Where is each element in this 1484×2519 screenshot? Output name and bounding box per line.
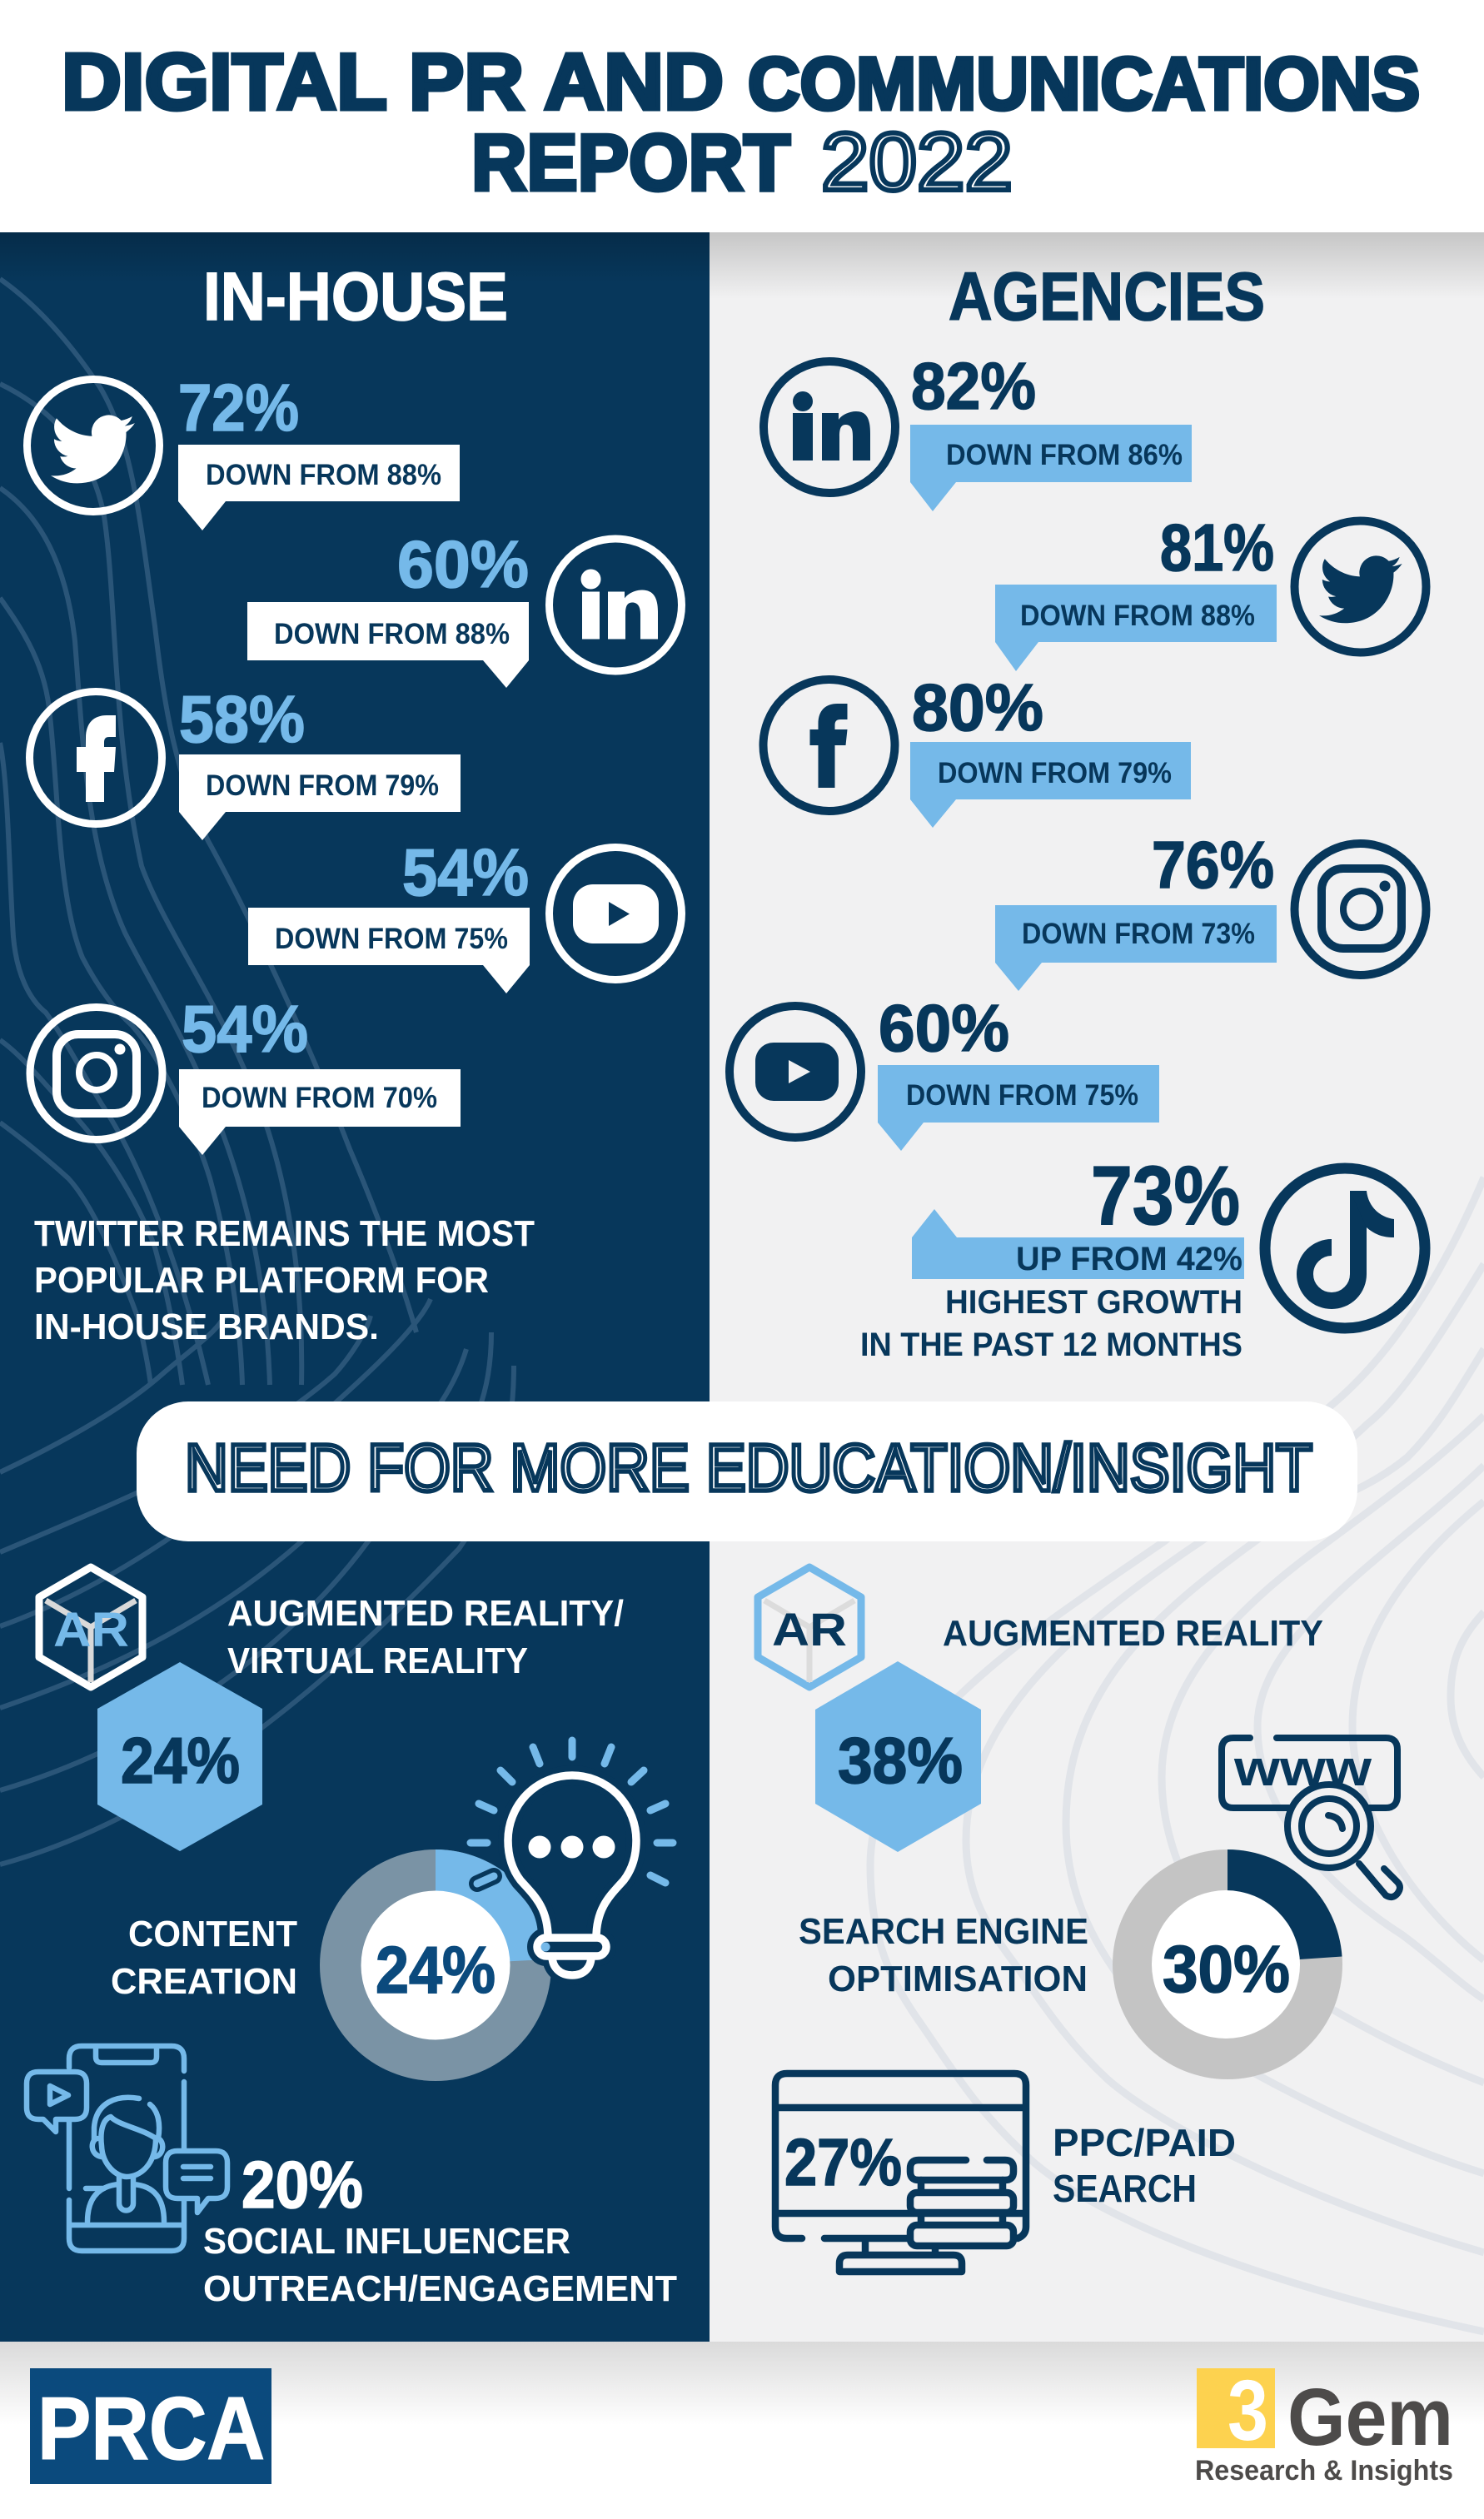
in-house facebook stat	[30, 682, 461, 840]
agencies SEO label	[799, 1911, 1088, 1999]
in-house AR icon: AR	[53, 1603, 129, 1657]
in-house AR label	[227, 1593, 624, 1681]
agencies youtube stat: 60%	[879, 991, 1009, 1065]
agencies youtube stat: DOWN FROM 75%	[906, 1079, 1138, 1112]
logo: 3Gem: Research & Insights	[1195, 2455, 1453, 2487]
agencies instagram stat: 76%	[1152, 828, 1274, 902]
icon: light bulb	[471, 1740, 673, 1975]
in-house content creation label	[111, 1914, 297, 2002]
agencies SEO label: SEARCH ENGINE	[799, 1911, 1088, 1952]
icon: twitter	[1294, 521, 1426, 653]
agencies donut chart: 30%	[1163, 1932, 1290, 2006]
agencies linkedin stat	[764, 349, 1192, 511]
agencies linkedin stat: DOWN FROM 86%	[946, 439, 1183, 471]
icon: tiktok	[1265, 1168, 1425, 1328]
logo: 3Gem: Gem	[1287, 2372, 1453, 2462]
agencies linkedin stat: 82%	[911, 349, 1036, 423]
in-house social influencer stat: 20%	[242, 2148, 363, 2222]
in-house instagram stat: 54%	[182, 992, 308, 1066]
agencies tiktok stat: IN THE PAST 12 MONTHS	[860, 1327, 1242, 1363]
in-house donut chart: 24%	[376, 1933, 495, 2007]
agencies PPC label: SEARCH	[1053, 2167, 1197, 2210]
panel: agencies	[710, 232, 1484, 2342]
icon: youtube	[730, 1006, 861, 1138]
agencies facebook stat: DOWN FROM 79%	[938, 757, 1172, 789]
agencies facebook stat	[763, 670, 1191, 828]
agencies AR icon: AR	[772, 1603, 847, 1655]
in-house youtube stat	[248, 835, 681, 993]
icon: instagram	[1294, 844, 1426, 975]
in-house linkedin stat: DOWN FROM 88%	[274, 618, 510, 650]
icon: instagram	[30, 1008, 162, 1139]
heading: in-house: IN-HOUSE	[203, 259, 508, 335]
banner: need for more education: NEED FOR MORE EDUCATION/INSIGHT	[185, 1431, 1312, 1505]
heading: agencies: AGENCIES	[949, 259, 1265, 335]
icon: www search: www	[1233, 1740, 1372, 1796]
icon: facebook	[763, 680, 894, 811]
in-house linkedin stat: 60%	[397, 527, 529, 601]
in-house facebook stat: DOWN FROM 79%	[206, 769, 439, 802]
agencies youtube stat	[730, 991, 1159, 1151]
agencies 38% hexagon: 38%	[838, 1724, 963, 1797]
in-house twitter stat	[27, 371, 460, 530]
in-house content creation label: CREATION	[111, 1961, 297, 2002]
in-house takeaway text: POPULAR PLATFORM FOR	[34, 1260, 489, 1301]
in-house 24% hexagon: 24%	[121, 1724, 240, 1797]
icon: linkedin	[550, 539, 681, 671]
in-house AR icon	[39, 1567, 142, 1687]
in-house instagram stat	[30, 992, 461, 1155]
agencies tiktok stat	[860, 1149, 1425, 1363]
agencies tiktok stat: HIGHEST GROWTH	[945, 1284, 1242, 1321]
agencies SEO label: OPTIMISATION	[828, 1959, 1088, 1999]
agencies twitter stat: 81%	[1160, 510, 1274, 585]
in-house social influencer stat	[203, 2148, 677, 2309]
agencies 27% stat: 27%	[784, 2125, 902, 2199]
agencies instagram stat	[995, 828, 1426, 991]
in-house facebook stat: 58%	[179, 682, 305, 756]
in-house takeaway text: TWITTER REMAINS THE MOST	[34, 1213, 535, 1254]
agencies PPC label	[1053, 2121, 1236, 2210]
agencies twitter stat: DOWN FROM 88%	[1020, 600, 1255, 632]
in-house takeaway text: IN-HOUSE BRANDS.	[34, 1307, 379, 1347]
in-house 24% hexagon	[97, 1662, 262, 1851]
logo: PRCA: PRCA	[37, 2378, 265, 2478]
in-house AR label: AUGMENTED REALITY/	[227, 1593, 624, 1634]
footer band	[0, 2342, 1484, 2425]
in-house twitter stat: 72%	[178, 371, 299, 445]
title: REPORT	[471, 118, 790, 207]
agencies AR icon	[758, 1567, 861, 1687]
in-house youtube stat: DOWN FROM 75%	[275, 923, 508, 955]
agencies donut chart	[1113, 1849, 1342, 2079]
in-house instagram stat: DOWN FROM 70%	[202, 1082, 437, 1114]
title	[62, 37, 1420, 207]
in-house youtube stat: 54%	[402, 835, 529, 909]
in-house twitter stat: DOWN FROM 88%	[206, 459, 441, 491]
icon: linkedin	[764, 361, 895, 493]
in-house takeaway text	[34, 1213, 535, 1347]
banner: need for more education	[137, 1401, 1357, 1541]
title: COMMUNICATIONS	[748, 42, 1420, 125]
agencies facebook stat: 80%	[912, 670, 1043, 744]
agencies twitter stat	[995, 510, 1426, 671]
title: DIGITAL PR AND	[62, 37, 724, 127]
agencies tiktok stat: UP FROM 42%	[1016, 1241, 1242, 1277]
in-house linkedin stat	[247, 527, 681, 688]
agencies tiktok stat: 73%	[1091, 1149, 1240, 1242]
agencies AR label: AUGMENTED REALITY	[943, 1613, 1323, 1654]
agencies PPC label: PPC/PAID	[1053, 2121, 1236, 2164]
title: 2022	[821, 116, 1013, 207]
in-house AR label: VIRTUAL REALITY	[227, 1640, 528, 1681]
in-house donut chart	[320, 1849, 551, 2081]
icon: youtube	[550, 848, 681, 979]
panel: in-house	[0, 232, 710, 2342]
agencies 38% hexagon	[815, 1661, 981, 1852]
in-house social influencer stat: SOCIAL INFLUENCER	[203, 2221, 570, 2262]
icon: www search	[1222, 1738, 1400, 1897]
logo: 3Gem	[1195, 2362, 1453, 2487]
icon: facebook	[30, 691, 162, 824]
icon: influencer phone	[27, 2046, 227, 2251]
in-house content creation label: CONTENT	[128, 1914, 297, 1954]
logo: 3Gem: 3	[1228, 2362, 1268, 2458]
in-house social influencer stat: OUTREACH/ENGAGEMENT	[203, 2268, 677, 2309]
icon: ppc monitor	[775, 2073, 1026, 2272]
icon: twitter	[27, 380, 160, 511]
agencies instagram stat: DOWN FROM 73%	[1022, 918, 1255, 950]
